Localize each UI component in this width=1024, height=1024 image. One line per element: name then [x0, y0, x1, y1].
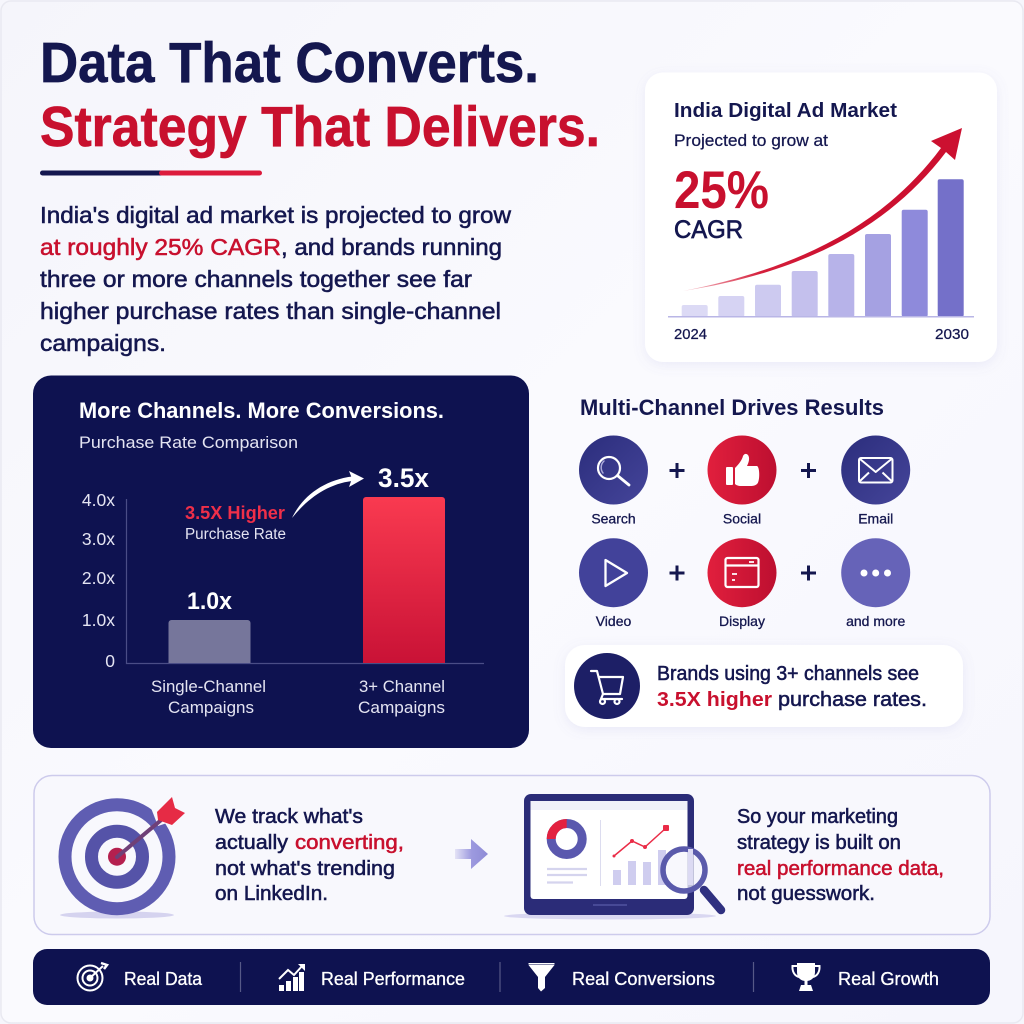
callout: 3.5X higher [185, 502, 286, 543]
channel: social [708, 436, 776, 526]
value 3.5x: 3.5x [378, 463, 429, 493]
callout text [657, 662, 927, 711]
intro paragraph: at roughly 25% CAGR [40, 234, 281, 260]
channel: email [841, 436, 910, 526]
y axis labels: 3.0x [82, 529, 115, 549]
mini bars [613, 850, 666, 885]
panel: purchase rate comparison [33, 376, 529, 748]
x label: 3+ channel [358, 678, 445, 717]
panel subheading: Purchase Rate Comparison [79, 433, 298, 452]
magnifier [663, 849, 721, 910]
panel: multi-channel [565, 395, 963, 727]
channel: video [579, 538, 648, 629]
x label: single-channel: Single-Channel [151, 678, 266, 696]
icon: growth chart [279, 964, 305, 991]
card heading: India Digital Ad Market [674, 99, 897, 122]
icon: funnel [528, 963, 554, 992]
right statement: real performance data, [737, 857, 944, 880]
callout arrow [292, 471, 364, 518]
title: Strategy That Delivers. [40, 95, 600, 159]
label: real data: Real Data [124, 969, 203, 989]
channel: display: Display [719, 613, 765, 629]
bar: single-channel [168, 620, 250, 663]
panel: India digital ad market [645, 72, 997, 362]
left statement [215, 805, 404, 905]
channel: and more [841, 538, 910, 629]
panel: tracking to strategy [34, 776, 990, 934]
left statement: not what's trending [215, 857, 395, 880]
label: real growth: Real Growth [838, 969, 939, 989]
right statement: not guesswork. [737, 882, 875, 905]
label: real conversions: Real Conversions [572, 969, 715, 989]
y axis labels: 2.0x [82, 568, 115, 588]
left statement: actually [215, 831, 289, 854]
icon: trophy [792, 963, 820, 991]
right statement [737, 805, 944, 905]
footer bar [33, 949, 990, 1005]
icon: target [60, 797, 185, 918]
donut chart [551, 824, 582, 854]
left statement: We track what's [215, 805, 363, 828]
intro paragraph: , and brands running [281, 234, 502, 260]
y axis labels: 4.0x [82, 490, 115, 510]
intro paragraph [40, 202, 511, 356]
channel: search: Search [591, 510, 636, 526]
icon: target small [78, 963, 107, 990]
y axis labels: 1.0x [82, 610, 115, 630]
x label: single-channel: Campaigns [168, 699, 254, 717]
right statement: strategy is built on [737, 831, 901, 854]
x label: single-channel [151, 678, 266, 717]
callout: 3.5X higher: Purchase Rate [185, 526, 286, 543]
callout text: 3.5X higher [657, 688, 772, 711]
callout text: purchase rates. [778, 688, 927, 711]
title underline [40, 170, 262, 176]
plus [801, 463, 816, 478]
icon: cart [574, 653, 640, 719]
channel: video: Video [596, 613, 631, 629]
left statement: converting, [295, 831, 404, 854]
label: real performance: Real Performance [321, 969, 465, 989]
section heading: Multi-Channel Drives Results [580, 395, 884, 420]
plus [801, 566, 816, 580]
axes [126, 499, 484, 664]
value 1.0x: 1.0x [187, 588, 233, 615]
icon: laptop dashboard [504, 794, 721, 920]
x label: 3+ channel: 3+ Channel [359, 678, 445, 696]
right statement: So your marketing [737, 805, 898, 828]
callout text: Brands using 3+ channels see [657, 662, 919, 685]
intro paragraph: campaigns. [40, 330, 166, 356]
y axis labels: 0 [105, 651, 115, 671]
channel: and more: and more [846, 613, 905, 629]
channel: social: Social [723, 510, 761, 526]
callout: brands using 3+ channels [565, 645, 963, 727]
card subheading: Projected to grow at [674, 132, 828, 150]
panel heading: More Channels. More Conversions. [79, 398, 444, 423]
growth arrow [683, 128, 962, 291]
callout: 3.5X higher: 3.5X Higher [185, 502, 285, 523]
bar: 3+ channel [363, 497, 445, 663]
title: Data That Converts. [40, 31, 539, 95]
intro paragraph: three or more channels together see far [40, 266, 472, 292]
CAGR label: CAGR [674, 216, 743, 244]
mini line chart [612, 825, 669, 858]
channel: search [579, 436, 648, 526]
x label: 3+ channel: Campaigns [358, 699, 445, 717]
plus [670, 463, 684, 478]
year start: 2024 [674, 327, 707, 343]
left statement: on LinkedIn. [215, 882, 328, 905]
title [40, 31, 600, 159]
25% figure: 25% [674, 161, 769, 220]
growth bars [668, 179, 974, 318]
intro paragraph: India's digital ad market is projected to grow [40, 202, 511, 228]
intro paragraph: higher purchase rates than single-channel [40, 298, 501, 324]
year end: 2030 [935, 327, 969, 343]
plus [670, 566, 684, 580]
channel: email: Email [858, 510, 893, 526]
channel: display [708, 538, 776, 629]
flow arrow [455, 839, 488, 869]
y axis labels [82, 490, 115, 671]
